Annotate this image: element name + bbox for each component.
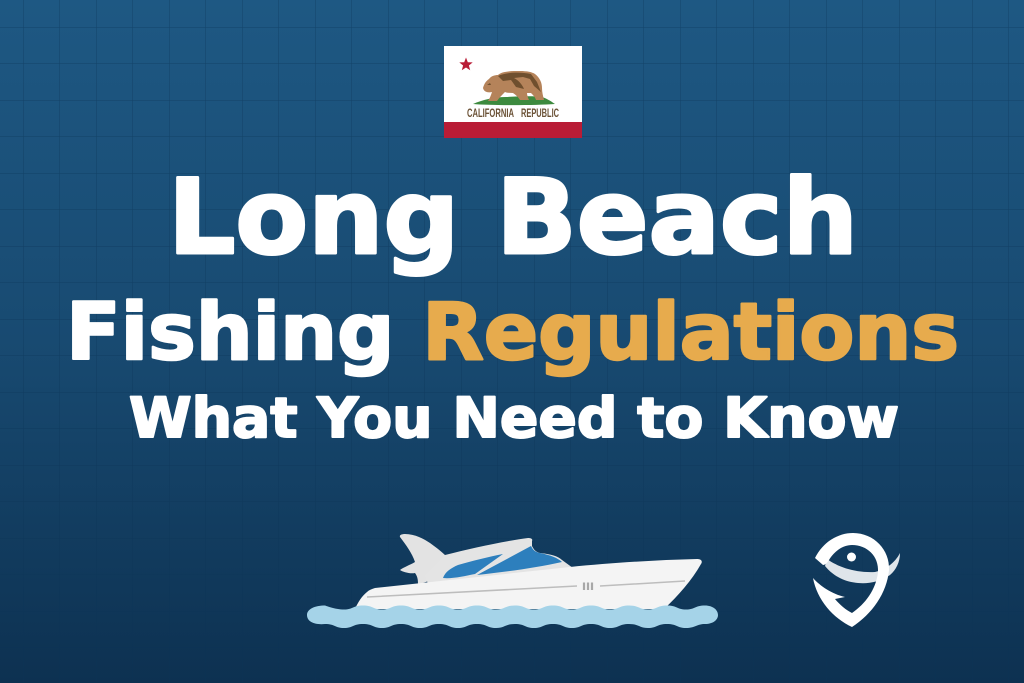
boat hull <box>355 559 702 609</box>
logo body <box>813 533 889 627</box>
flag bear <box>483 71 544 101</box>
boat cabin <box>425 538 573 590</box>
boat fin <box>400 534 470 585</box>
hull stripe <box>367 581 685 597</box>
flag text: CALIFORNIA <box>467 108 514 120</box>
flag text: REPUBLIC <box>521 108 559 120</box>
flag star <box>459 58 473 70</box>
hull vents <box>584 582 592 590</box>
title: Long Beach: Long Beach <box>168 158 858 278</box>
logo eye <box>847 552 856 562</box>
logo band <box>825 553 900 583</box>
boat windows <box>443 554 503 578</box>
subtitle: What You Need to Know: What You Need to Know <box>129 386 899 450</box>
icon: California flag <box>444 46 582 138</box>
icon: fish hook logo <box>813 533 900 627</box>
water waves <box>307 606 718 628</box>
heading: Fishing Regulations: Fishing Regulations <box>66 288 959 378</box>
flag grass <box>473 96 555 105</box>
icon: boat on water <box>307 534 718 628</box>
